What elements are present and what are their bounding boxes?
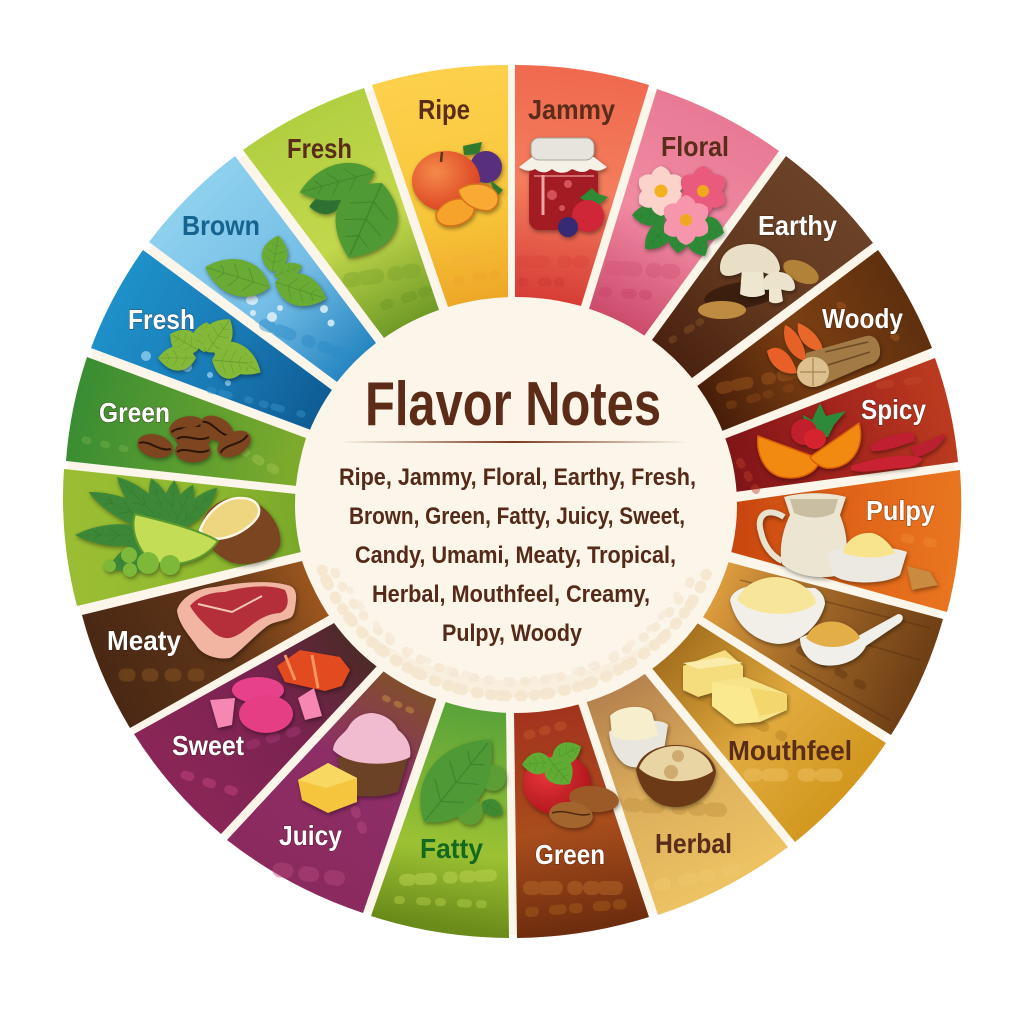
icon: basil sprig with droplets	[158, 311, 268, 385]
icon: fresh green leaves	[295, 155, 411, 271]
text block: list of flavor notes: Pulpy, Woody	[442, 620, 583, 647]
panel: Green with coffee beans	[66, 357, 306, 486]
icon: coffee beans	[135, 410, 255, 463]
label: Fatty: Fatty	[420, 833, 483, 864]
label: Pulpy: Pulpy	[866, 495, 935, 526]
icon: cream pitcher and bowl	[760, 493, 938, 590]
panel: Pulpy	[731, 470, 961, 612]
icon: pink flowers with leaves	[632, 166, 730, 261]
panel: Fresh green	[243, 88, 439, 338]
label: Jammy: Jammy	[528, 94, 615, 125]
label: Woody: Woody	[822, 303, 903, 334]
panel: Herbal	[586, 673, 788, 915]
text block: list of flavor notes: Brown, Green, Fatty, Juicy, Sweet,	[349, 503, 685, 530]
label: Spicy: Spicy	[861, 394, 926, 425]
text block: list of flavor notes: Herbal, Mouthfeel, Creamy,	[372, 581, 650, 608]
label: Green: Green	[535, 839, 605, 870]
label: Fresh: Fresh	[287, 133, 352, 164]
icon: red apple and nuts	[521, 736, 620, 830]
panel: Fatty	[371, 701, 513, 938]
panel: Mouthfeel	[651, 623, 886, 842]
panel: cream on wood	[703, 562, 943, 735]
label: Earthy: Earthy	[758, 210, 837, 241]
background wheel disc	[66, 69, 956, 935]
label: Meaty: Meaty	[107, 625, 181, 656]
panel: Green with apple	[514, 703, 649, 938]
panel: lime and coconut	[63, 469, 301, 606]
panel: Sweet	[134, 622, 377, 834]
icon: cream bowl and spoon	[730, 577, 903, 666]
icon: cupcake and butter cube	[298, 713, 410, 813]
panel: Floral	[589, 89, 779, 336]
panel: Meaty	[82, 561, 330, 728]
icon: raw steak	[177, 582, 296, 659]
icon: herbs, lime wedge, peas and coconut	[75, 469, 280, 580]
label: Sweet: Sweet	[172, 730, 244, 761]
label: Juicy: Juicy	[279, 820, 342, 851]
panel: Jammy	[515, 65, 649, 306]
icon: green leaf and peas	[402, 721, 513, 840]
label: Mouthfeel: Mouthfeel	[728, 735, 852, 766]
title: Flavor Notes	[365, 370, 661, 439]
panel: Fresh blue	[91, 250, 332, 430]
icon: orange slices and chili peppers	[758, 403, 946, 478]
icon: white bowl and coconut bowl	[609, 707, 716, 807]
label: Brown: Brown	[182, 210, 260, 241]
panel: Earthy	[652, 156, 873, 378]
icon: mushrooms on soil	[698, 244, 822, 319]
icon: orange pods and wood log	[767, 323, 880, 387]
label: Ripe: Ripe	[418, 94, 470, 125]
icon: butter cubes	[683, 650, 787, 724]
text block: list of flavor notes: Ripe, Jammy, Floral, Earthy, Fresh,	[339, 464, 696, 491]
label: Floral: Floral	[661, 131, 729, 162]
panel: Woody	[696, 250, 932, 431]
text block: list of flavor notes: Candy, Umami, Meaty, Tropical,	[355, 542, 676, 569]
label: Green: Green	[99, 397, 170, 428]
divider rule	[340, 441, 687, 443]
panel: Spicy	[724, 358, 958, 492]
icon: pink wrapped candy and red candy	[210, 650, 350, 733]
panel: center disc	[295, 297, 737, 713]
icon: jam jar with berries	[519, 138, 608, 237]
label: Herbal: Herbal	[655, 828, 732, 859]
label: Fresh: Fresh	[128, 304, 195, 335]
icon: mint leaves	[200, 233, 331, 314]
panel: Juicy	[227, 671, 437, 913]
icon: apple, plum and peach slices	[412, 142, 503, 226]
panel: Ripe	[372, 65, 508, 307]
text block: list of flavor notes	[339, 464, 696, 647]
panel: Brown	[149, 156, 376, 382]
